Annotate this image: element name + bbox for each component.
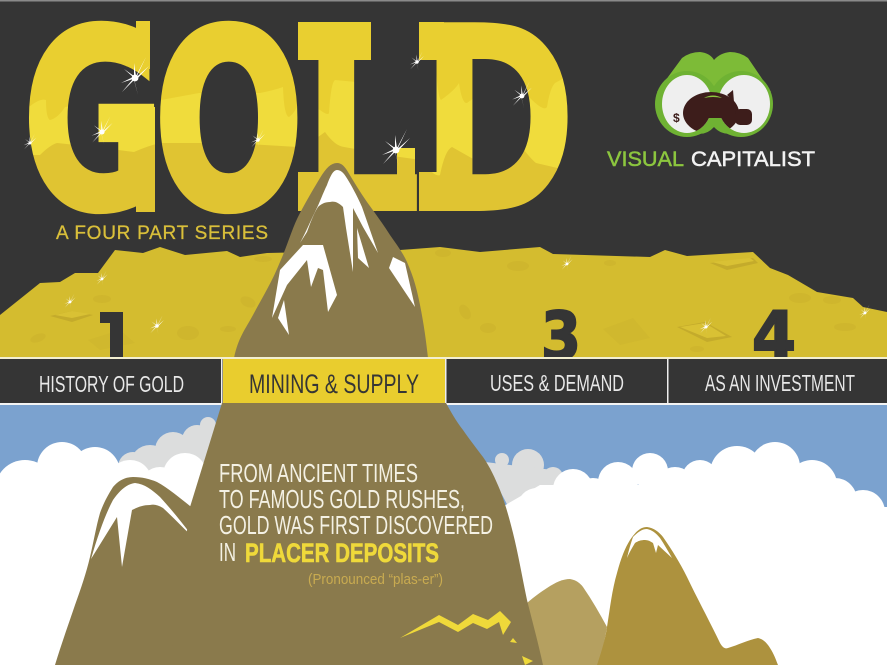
snow cap [272,170,415,335]
logo icon: binoculars with piggy bank: $ [673,111,680,125]
pronunciation note: (Pronounced “plas-er”) [308,571,443,588]
logo icon: binoculars with piggy bank [655,52,773,137]
navigation bar [0,357,887,403]
top edge strip [0,0,887,2]
main mountain lower body [170,403,543,665]
back hill [527,579,607,665]
tab: mining and supply: MINING & SUPPLY [249,369,419,399]
number 4: 4 [752,298,796,375]
background grey clouds [118,417,563,510]
gold vein [400,611,533,665]
main mountain peak [234,163,428,358]
title: GOLD [29,20,568,214]
logo: Visual Capitalist [607,52,815,171]
number 3: 3 [541,298,581,375]
line 1: FROM ANCIENT TIMES [219,458,418,488]
logo wordmark [607,148,815,171]
section numbers [100,298,796,375]
snow cap [91,483,193,567]
sky [0,405,887,665]
line 2: TO FAMOUS GOLD RUSHES, [219,484,465,514]
tab: history of gold: HISTORY OF GOLD [39,371,184,397]
sparkles [24,52,871,335]
sparkle on mountain [382,129,410,167]
gold pile [0,247,887,358]
tab: uses and demand: USES & DEMAND [490,370,624,396]
left mountain [55,477,230,665]
line 4: IN [219,537,236,567]
white clouds [0,442,887,665]
gold bars [50,258,758,350]
snow cap [627,529,672,558]
front hill [597,527,778,665]
number 1 [100,312,123,358]
tab: mining and supply [223,359,445,403]
line 3: GOLD WAS FIRST DISCOVERED [219,510,493,540]
highlight: placer deposits: PLACER DEPOSITS [245,538,439,568]
logo wordmark: CAPITALIST [691,148,815,171]
nuggets [29,249,856,352]
logo wordmark: VISUAL [607,148,684,171]
subtitle: A FOUR PART SERIES [56,223,268,244]
intro text [219,458,493,568]
